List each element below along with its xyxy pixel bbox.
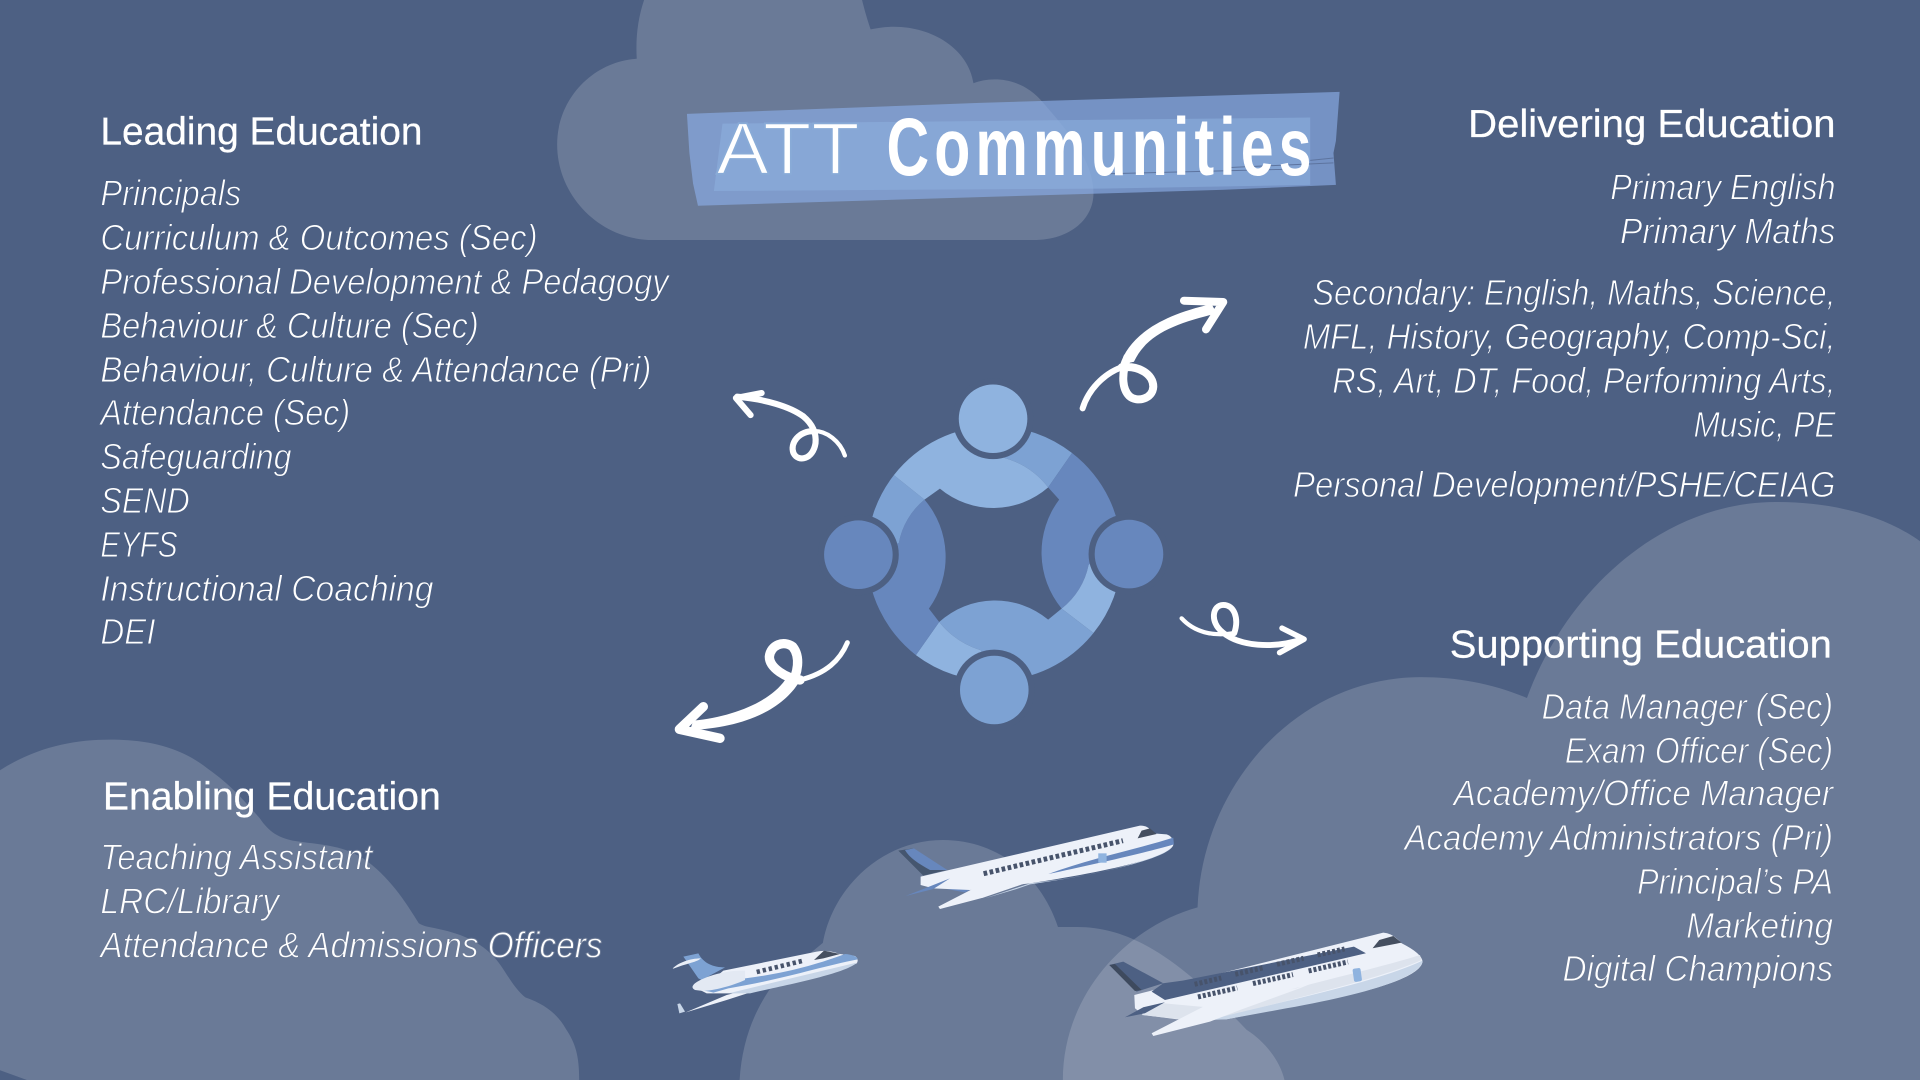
list: enabling education roles: Teaching Assistant [100, 836, 374, 877]
list: secondary subjects: MFL, History, Geography, Comp-Sci, [1303, 316, 1836, 357]
list: leading education roles: Behaviour, Culture & Attendance (Pri) [100, 349, 651, 390]
list: leading education roles: DEI [100, 611, 156, 652]
list: enabling education roles [99, 836, 602, 966]
arrow: bottom left [679, 643, 847, 738]
list: leading education roles [99, 173, 670, 652]
list: secondary subjects [1303, 272, 1836, 445]
list: primary subjects: Primary English [1610, 167, 1836, 208]
list: secondary subjects: Music, PE [1693, 404, 1836, 445]
panel: supporting education [1403, 624, 1835, 989]
list: supporting education roles: Marketing [1686, 905, 1833, 946]
list: supporting education roles [1403, 686, 1835, 989]
title banner [687, 92, 1340, 206]
cloud: bottom centre [740, 840, 1284, 1080]
title text: Communities: Communities [887, 102, 1311, 193]
heading: leading education: Leading Education [100, 110, 422, 153]
list: primary subjects: Primary Maths [1620, 211, 1836, 252]
list: leading education roles: Principals [100, 173, 241, 214]
list: enabling education roles: LRC/Library [100, 880, 281, 921]
list: leading education roles: Professional Development & Pedagogy [100, 261, 670, 302]
list: supporting education roles: Data Manager (Sec) [1542, 686, 1833, 727]
list: secondary subjects: Secondary: English, Maths, Science, [1313, 272, 1836, 313]
panel: enabling education [99, 775, 602, 966]
list: supporting education roles: Exam Officer (Sec) [1565, 730, 1833, 771]
list: leading education roles: SEND [100, 480, 190, 521]
list: leading education roles: Behaviour & Culture (Sec) [100, 305, 479, 346]
list: supporting education roles: Digital Champions [1562, 948, 1833, 989]
cloud: bottom left [0, 740, 579, 1080]
list: leading education roles: Safeguarding [100, 436, 291, 477]
heading: delivering education: Delivering Education [1468, 103, 1836, 146]
title text: ATT: ATT [716, 107, 860, 190]
plane: bottom right [1109, 933, 1423, 1036]
cloud: bottom right [1063, 502, 1920, 1080]
list: leading education roles: Attendance (Sec) [99, 392, 350, 433]
plane: small left [673, 951, 858, 1013]
panel: leading education [99, 110, 670, 652]
arrow: top right [1083, 301, 1223, 408]
arrow: top left [736, 393, 845, 458]
heading: enabling education: Enabling Education [103, 775, 441, 818]
cloud: top centre behind title [557, 0, 1093, 240]
text: personal development: Personal Development/PSHE/CEIAG [1293, 464, 1836, 505]
list: leading education roles: Curriculum & Outcomes (Sec) [100, 217, 538, 258]
list: supporting education roles: Principal’s PA [1637, 861, 1833, 902]
list: leading education roles: EYFS [100, 524, 178, 565]
arrow: right [1182, 605, 1304, 653]
list: leading education roles: Instructional Coaching [100, 568, 433, 609]
brush stroke background [687, 92, 1340, 206]
panel: delivering education [1293, 103, 1836, 505]
list: primary subjects [1610, 167, 1836, 252]
list: secondary subjects: RS, Art, DT, Food, Performing Arts, [1332, 360, 1836, 401]
icon: four people in a circle [818, 378, 1169, 730]
list: supporting education roles: Academy/Office Manager [1452, 773, 1835, 814]
plane: top middle [898, 826, 1174, 909]
heading: supporting education: Supporting Education [1450, 624, 1832, 667]
list: enabling education roles: Attendance & Admissions Officers [99, 925, 602, 966]
list: supporting education roles: Academy Administrators (Pri) [1403, 817, 1833, 858]
